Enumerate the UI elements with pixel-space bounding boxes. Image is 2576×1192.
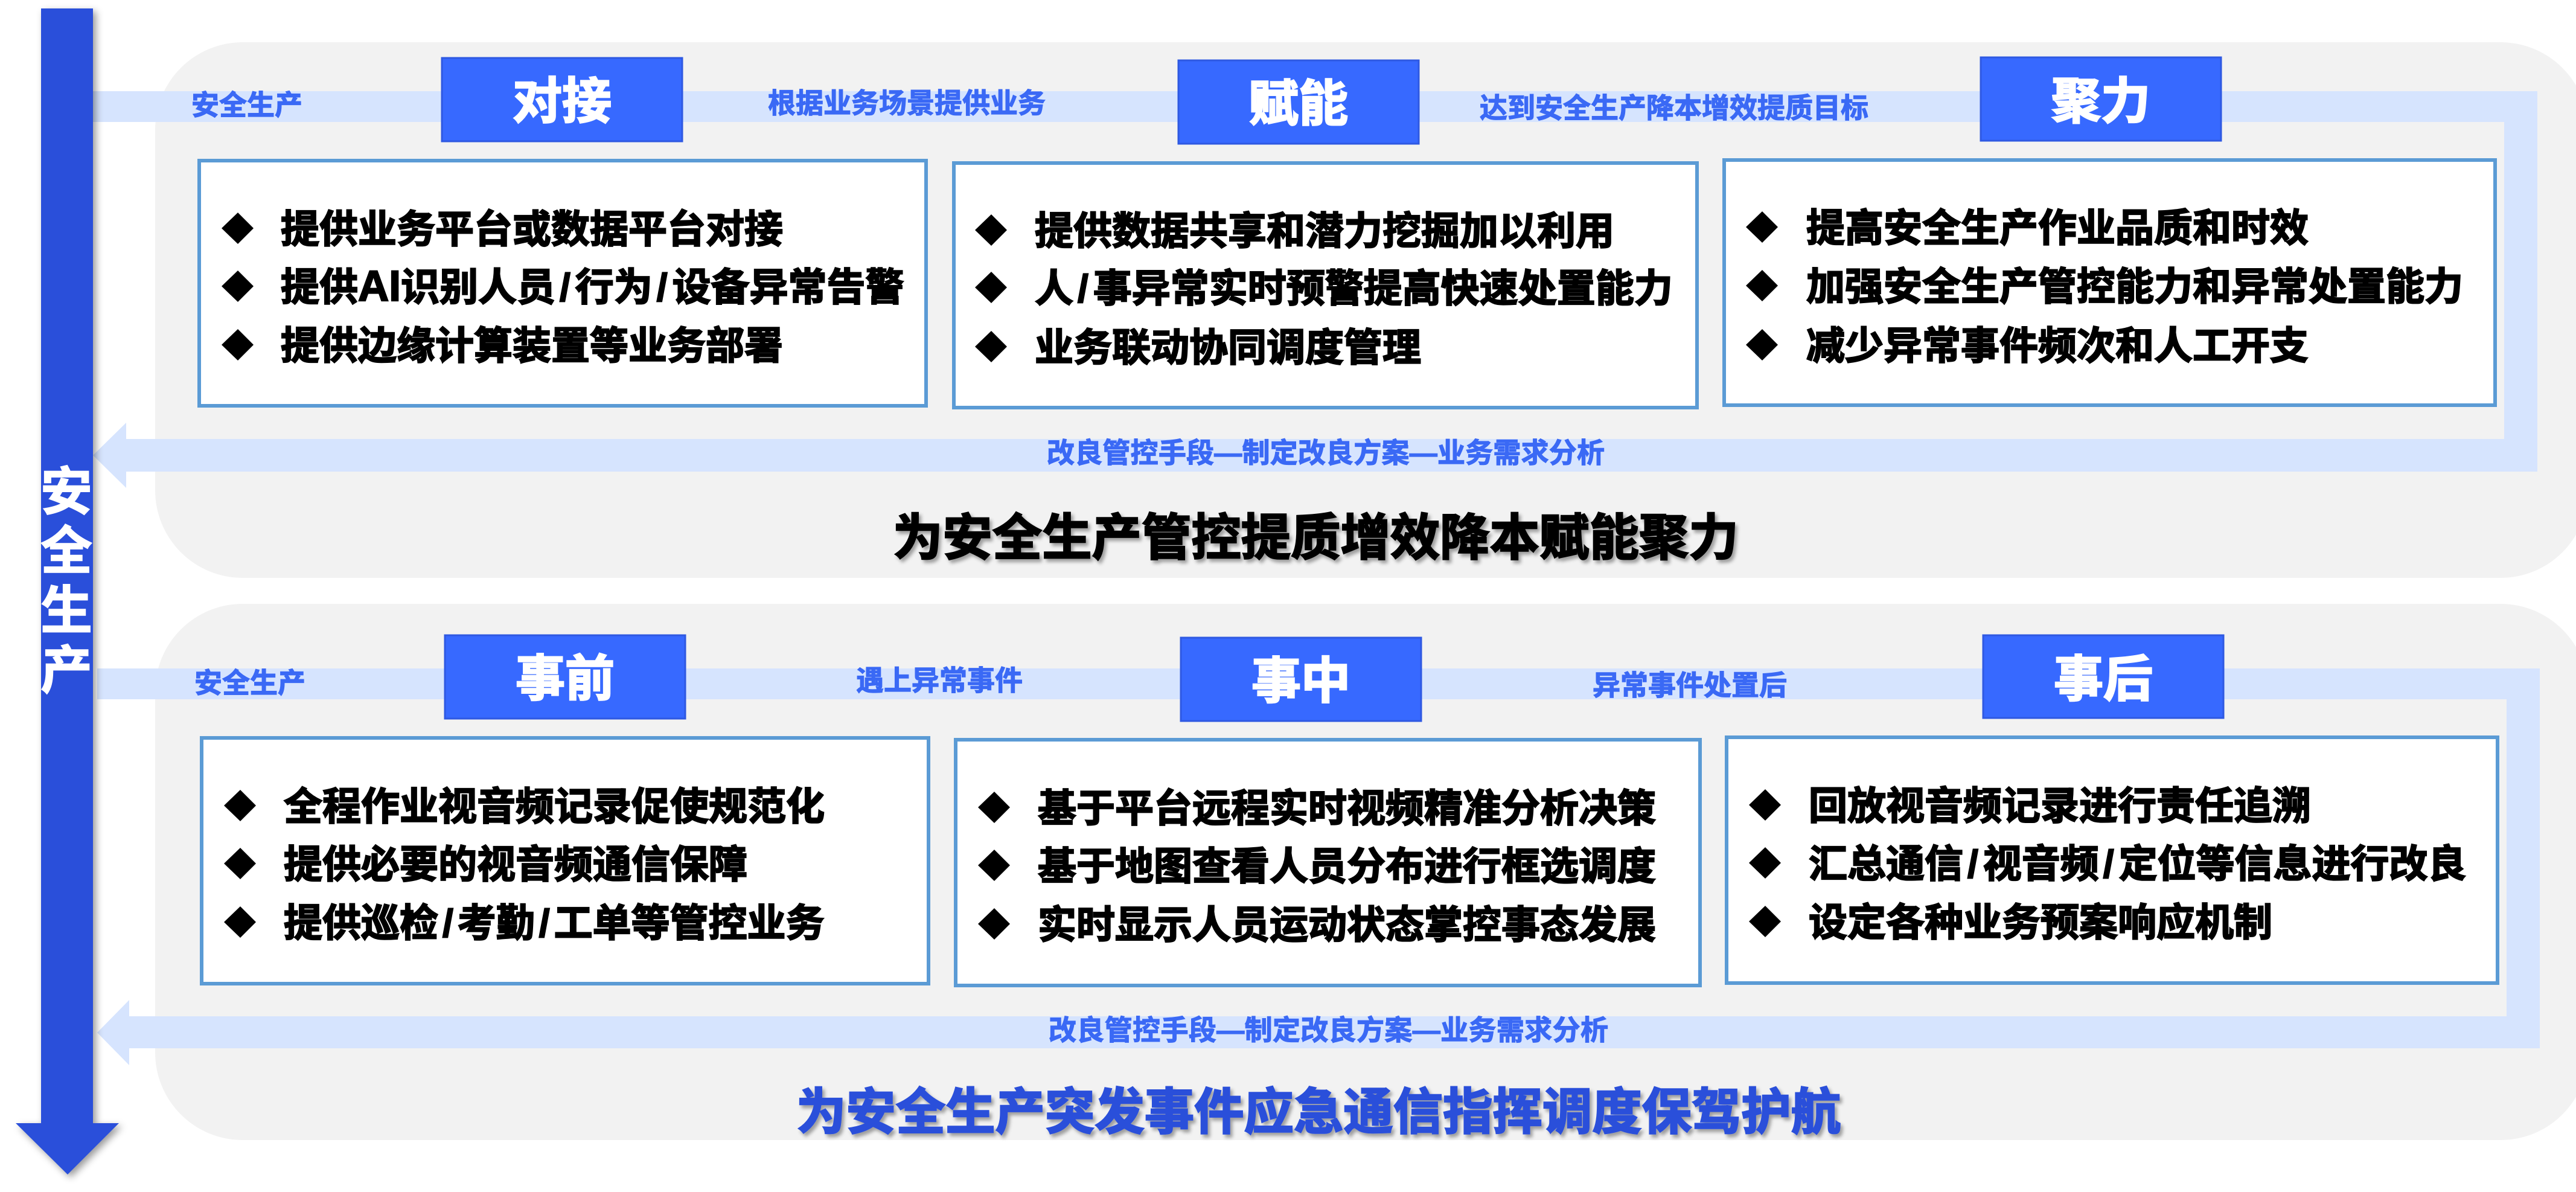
vertical arrow: 安全生产 [16, 8, 119, 1174]
card: 事后 [1727, 737, 2498, 983]
card: 事中: 基于平台远程实时视频精准分析决策 [1038, 787, 1656, 830]
card: 赋能 [954, 163, 1697, 408]
card: 对接: 提供AI识别人员/行为/设备异常告警 [281, 263, 904, 310]
card: 事前 [202, 738, 928, 984]
heading box: 事中: 事中 [1251, 654, 1350, 709]
heading box: 赋能: 赋能 [1249, 77, 1348, 132]
card: 赋能: 人/事异常实时预警提高快速处置能力 [1035, 267, 1673, 310]
card: 聚力: 提高安全生产作业品质和时效 [1806, 207, 2309, 250]
vertical label: 安 [40, 463, 92, 521]
heading box: 事前: 事前 [516, 652, 615, 707]
section title: 为安全生产管控提质增效降本赋能聚力 [893, 510, 1739, 566]
card: 事中: 实时显示人员运动状态掌控事态发展 [1038, 903, 1656, 947]
label: return flow: 改良管控手段—制定改良方案—业务需求分析 [1047, 437, 1605, 469]
card: 聚力: 加强安全生产管控能力和异常处置能力 [1806, 265, 2463, 309]
card: 事前: 提供巡检/考勤/工单等管控业务 [284, 902, 825, 945]
card: 对接: 提供边缘计算装置等业务部署 [281, 324, 783, 368]
label: business scenario: 根据业务场景提供业务 [768, 88, 1046, 119]
flow arrow band with return arrow [93, 91, 2537, 488]
card: 对接: 提供业务平台或数据平台对接 [281, 208, 783, 251]
heading box: 聚力: 聚力 [2051, 74, 2150, 129]
heading box: 赋能 [1178, 60, 1419, 144]
label: return flow: 改良管控手段—制定改良方案—业务需求分析 [1049, 1014, 1608, 1046]
card: 赋能: 业务联动协同调度管理 [1035, 326, 1421, 370]
heading box: 事后 [1983, 635, 2223, 718]
label: target: 达到安全生产降本增效提质目标 [1480, 92, 1868, 124]
card: 聚力 [1724, 160, 2495, 405]
card: 赋能: 提供数据共享和潜力挖掘加以利用 [1035, 210, 1614, 253]
label: start of flow: 安全生产 [194, 667, 305, 699]
card: 事中 [956, 740, 1700, 985]
panel background [155, 42, 2576, 578]
heading box: 对接 [442, 58, 682, 141]
section title: 为安全生产突发事件应急通信指挥调度保驾护航 [796, 1085, 1841, 1140]
card: 事后: 回放视音频记录进行责任追溯 [1809, 784, 2311, 828]
label: after event: 异常事件处置后 [1593, 670, 1787, 701]
card: 事前: 全程作业视音频记录促使规范化 [284, 785, 825, 828]
vertical label: 全 [40, 522, 92, 580]
card: 事后: 汇总通信/视音频/定位等信息进行改良 [1809, 842, 2467, 886]
vertical label [40, 463, 92, 700]
card: 事中: 基于地图查看人员分布进行框选调度 [1038, 845, 1656, 888]
card: 事前: 提供必要的视音频通信保障 [284, 843, 747, 886]
label: start of flow: 安全生产 [191, 89, 302, 121]
panel background [155, 604, 2576, 1140]
heading box: 事中 [1181, 638, 1421, 721]
heading box: 事前 [445, 635, 685, 719]
heading box: 对接: 对接 [513, 74, 612, 129]
flow arrow band with return arrow [97, 668, 2540, 1065]
heading box: 事后: 事后 [2054, 652, 2153, 707]
heading box: 聚力 [1981, 57, 2221, 141]
card: 事后: 设定各种业务预案响应机制 [1809, 901, 2272, 944]
panel: top section (empowerment) [93, 42, 2576, 578]
panel: bottom section (emergency) [97, 604, 2576, 1140]
label: abnormal event: 遇上异常事件 [856, 665, 1023, 696]
card: 聚力: 减少异常事件频次和人工开支 [1806, 324, 2309, 368]
arrow shape [16, 8, 119, 1174]
card: 对接 [199, 161, 926, 406]
vertical label: 生 [40, 582, 92, 640]
vertical label: 产 [40, 642, 92, 700]
